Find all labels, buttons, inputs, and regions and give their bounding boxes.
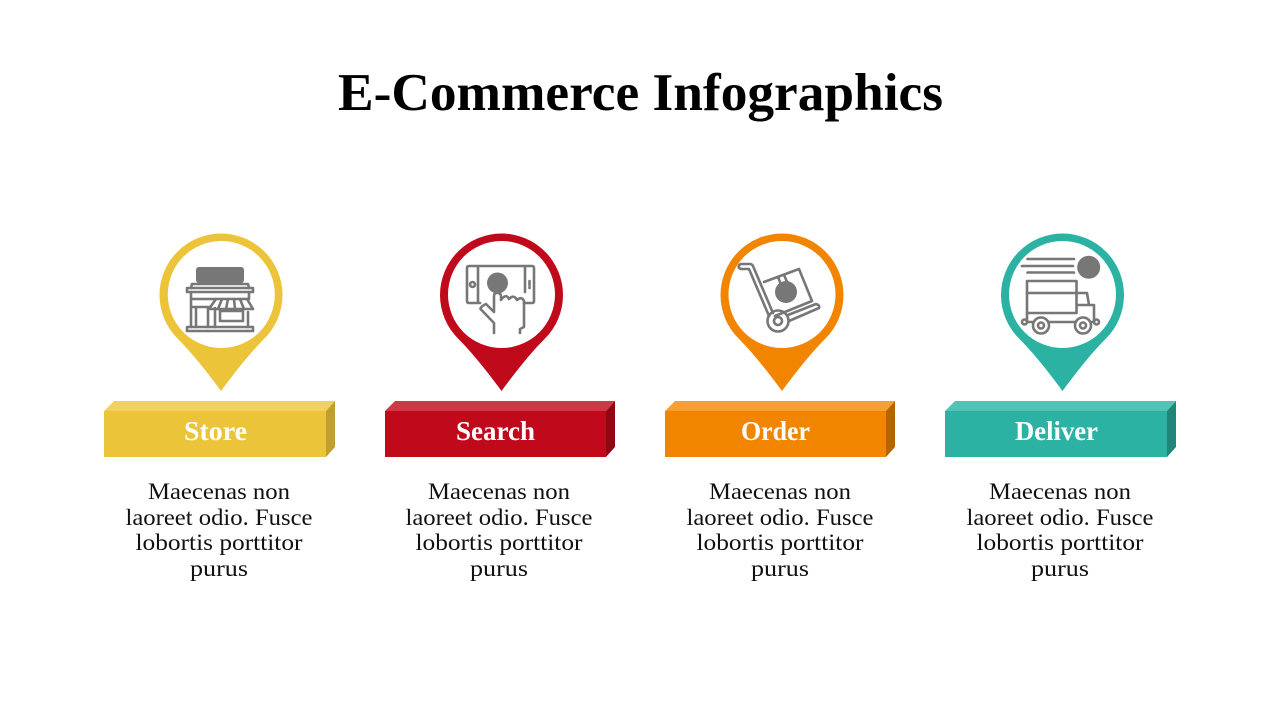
bar: search: Search [456,416,535,446]
panel: order [665,234,895,581]
icon: hand on tablet [467,266,534,333]
text block: deliver: laoreet odio. Fusce [966,505,1154,530]
text block: deliver [966,479,1154,581]
text block: search: Maecenas non [428,479,571,504]
bar: search [385,401,615,457]
text block: search: laoreet odio. Fusce [406,505,592,530]
text block: search: lobortis porttitor [416,530,583,555]
icon: delivery truck [1022,256,1100,334]
text block: search [406,479,592,581]
bar: order [665,401,895,457]
pin: deliver [1001,234,1124,391]
panel: deliver [945,234,1176,581]
text block: store: Maecenas non [148,479,291,504]
text block: store: laoreet odio. Fusce [126,505,312,530]
bar: deliver: Deliver [1015,416,1098,446]
title: E-Commerce Infographics [338,64,943,122]
panel: store [104,234,335,581]
bar: store: Store [184,416,247,446]
panel: search [385,234,615,581]
bar: store [104,401,335,457]
text block: store: purus [190,556,248,581]
text block: order: lobortis porttitor [696,530,864,555]
text block: order: Maecenas non [709,479,852,504]
icon: storefront [187,267,253,331]
text block: order [686,479,874,581]
bar: order: Order [741,416,810,446]
text block: order: laoreet odio. Fusce [686,505,874,530]
text block: store [126,479,312,581]
text block: deliver: lobortis porttitor [976,530,1144,555]
text block: store: lobortis porttitor [136,530,303,555]
text block: order: purus [751,556,809,581]
text block: search: purus [470,556,528,581]
text block: deliver: purus [1031,556,1089,581]
pin: search [440,234,563,391]
icon: hand truck with parcel [739,264,819,332]
pin: store [160,234,282,391]
text block: deliver: Maecenas non [989,479,1132,504]
bar: deliver [945,401,1176,457]
pin: order [720,234,843,391]
